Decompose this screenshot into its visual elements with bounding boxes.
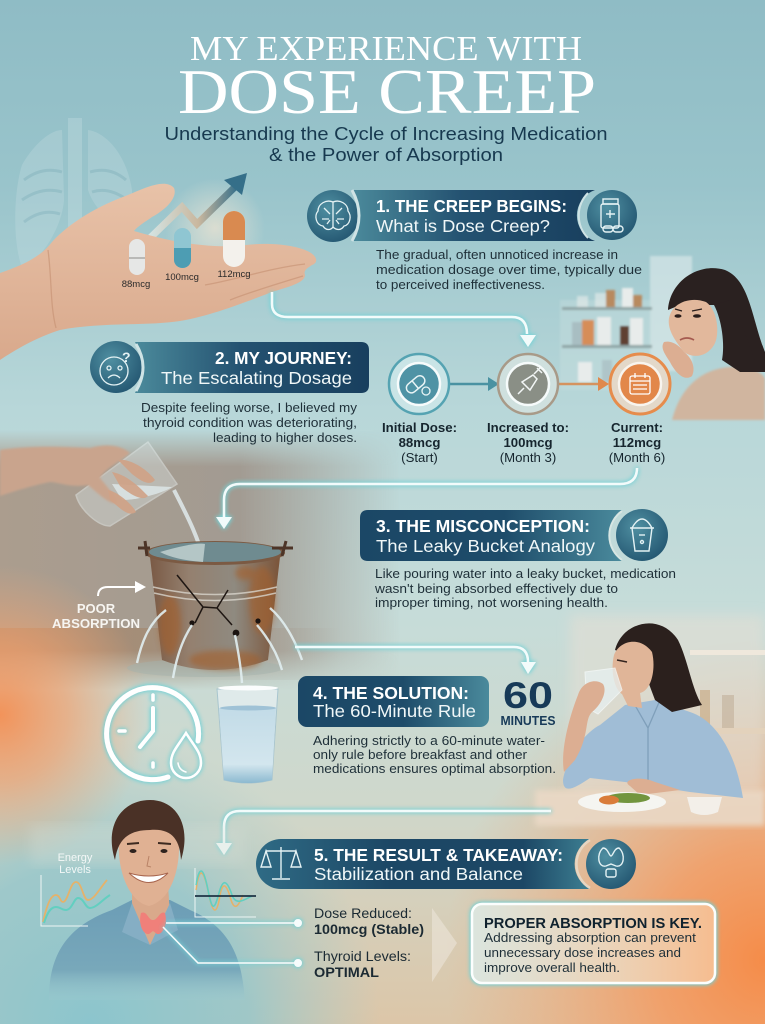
step: current	[609, 354, 670, 465]
section 1 body text: The gradual, often unnoticed increase in	[376, 247, 618, 262]
pill 88mcg: 88mcg	[122, 279, 150, 290]
section 4 body text	[313, 733, 556, 776]
section 5 heading banner: Stabilization and Balance	[314, 864, 523, 884]
60 minutes callout: 60	[503, 675, 553, 716]
water stream	[174, 490, 204, 562]
orange wash at left edge	[0, 560, 150, 870]
takeaway callout box: unnecessary dose increases and	[484, 945, 681, 960]
hand and glass	[585, 668, 622, 714]
title: MY EXPERIENCE WITH	[190, 29, 582, 68]
title	[178, 29, 596, 127]
title: DOSE CREEP	[178, 56, 596, 127]
subtitle: Understanding the Cycle of Increasing Medication	[164, 123, 608, 144]
section 1 heading banner	[307, 190, 637, 242]
icon: scales	[261, 847, 301, 879]
section 4 heading banner	[298, 676, 489, 727]
section 1 heading banner: 1. THE CREEP BEGINS:	[376, 196, 567, 216]
photo: worried woman	[663, 268, 765, 420]
icon: clock with water drop	[107, 688, 201, 780]
callout: poor absorption	[52, 581, 146, 631]
section 2 body text: Despite feeling worse, I believed my	[141, 400, 357, 415]
photo: smiling man with thyroid highlight	[30, 800, 245, 1000]
section 5 heading banner: 5. THE RESULT & TAKEAWAY:	[314, 845, 563, 865]
connectors from thyroid to results	[163, 920, 302, 966]
step: current: 112mcg	[613, 435, 661, 450]
section 1 heading banner: What is Dose Creep?	[376, 216, 550, 236]
60 minutes callout	[500, 675, 556, 728]
step: increased: Increased to:	[487, 420, 569, 435]
trend arrow	[150, 173, 247, 238]
takeaway callout box: PROPER ABSORPTION IS KEY.	[484, 915, 702, 932]
subtitle: & the Power of Absorption	[269, 144, 503, 165]
photo: pharmacy shelves	[560, 256, 692, 390]
photo: woman drinking water at table	[535, 615, 765, 826]
section 3 body text	[374, 566, 676, 610]
section 2 body text: leading to higher doses.	[213, 430, 357, 445]
section 4 heading banner: The 60-Minute Rule	[313, 701, 476, 721]
hand	[0, 184, 316, 360]
results list: OPTIMAL	[314, 965, 379, 980]
takeaway callout box: Addressing absorption can prevent	[484, 930, 696, 945]
results list: 100mcg (Stable)	[314, 922, 424, 937]
section 3 body text: wasn't being absorbed effectively due to	[374, 581, 618, 596]
section 2 heading banner	[90, 341, 369, 393]
photo: wall and table behind bucket	[0, 430, 400, 690]
results list: Thyroid Levels:	[314, 949, 411, 964]
section 3 heading banner: 3. THE MISCONCEPTION:	[376, 516, 590, 536]
energy levels chart: Energy	[58, 852, 93, 864]
pill 112mcg: 112mcg	[217, 269, 251, 280]
step: initial dose: 88mcg	[399, 435, 440, 450]
illustration: glass of water	[217, 686, 278, 783]
step: initial dose: Initial Dose:	[382, 420, 457, 435]
step: increased: 100mcg	[503, 435, 553, 450]
step: increased: (Month 3)	[500, 450, 556, 465]
thyroid highlight	[140, 912, 166, 934]
flow arrow from timeline to bucket	[216, 468, 637, 529]
icon: worried face: ?	[122, 349, 131, 365]
flow arrow from solution to result	[216, 811, 551, 855]
step: current: Current:	[611, 420, 663, 435]
illustration: hand pouring water from glass	[0, 442, 204, 562]
flow arrow from bucket to solution	[295, 647, 536, 674]
section 4 heading banner: 4. THE SOLUTION:	[313, 683, 469, 703]
dosage timeline	[382, 354, 670, 465]
subtitle	[164, 123, 608, 165]
hair	[615, 623, 702, 712]
step: initial dose: (Start)	[401, 450, 438, 465]
face	[613, 642, 654, 708]
plate of food	[578, 792, 722, 815]
arm and fingers	[0, 446, 130, 503]
callout: poor absorption: ABSORPTION	[52, 616, 140, 631]
section 1 body text	[376, 247, 642, 292]
pill 100mcg	[165, 228, 199, 283]
section 4 body text: medications ensures optimal absorption.	[313, 761, 556, 776]
flow arrow from section 1 to timeline	[272, 292, 536, 347]
section 1 body text: to perceived ineffectiveness.	[376, 277, 545, 292]
section 3 body text: improper timing, not worsening health.	[375, 595, 608, 610]
section 2 heading banner: 2. MY JOURNEY:	[215, 348, 352, 368]
callout: poor absorption: POOR	[77, 601, 116, 616]
illustration: leaking rusty bucket	[127, 541, 302, 683]
section 3 heading banner: The Leaky Bucket Analogy	[376, 536, 595, 556]
results list	[314, 906, 424, 980]
section 3 body text: Like pouring water into a leaky bucket, medication	[375, 566, 676, 581]
icon: leaky bucket	[630, 519, 654, 551]
section 5 heading banner	[256, 839, 636, 889]
section 1 body text: medication dosage over time, typically due	[376, 262, 642, 277]
section 4 body text: only rule before breakfast and other	[313, 747, 528, 762]
icon: thyroid	[599, 848, 623, 877]
takeaway callout box: improve overall health.	[484, 960, 620, 975]
illustration: hand holding three pills	[0, 173, 316, 360]
step: initial dose	[382, 354, 457, 465]
thyroid wave chart	[195, 868, 256, 917]
60 minutes callout: MINUTES	[500, 714, 556, 728]
section 2 body text: thyroid condition was deteriorating,	[143, 415, 357, 430]
x-ray lungs image	[15, 118, 132, 268]
step: increased	[487, 354, 569, 465]
section 2 heading banner: The Escalating Dosage	[161, 368, 352, 388]
section 3 heading banner	[360, 509, 668, 561]
icon: pill bottle	[601, 199, 623, 232]
pill 100mcg: 100mcg	[165, 272, 199, 283]
step: current: (Month 6)	[609, 450, 665, 465]
icon: brain	[316, 201, 350, 230]
section 4 body text: Adhering strictly to a 60-minute water-	[313, 733, 545, 748]
glass	[76, 442, 177, 526]
pill 112mcg	[217, 211, 251, 280]
chevron arrow	[432, 908, 457, 982]
results list: Dose Reduced:	[314, 906, 412, 921]
energy levels chart: Levels	[59, 864, 91, 876]
takeaway callout box	[472, 904, 715, 983]
section 2 body text	[141, 400, 357, 445]
shirt	[563, 700, 743, 798]
icon: worried face	[100, 349, 131, 385]
pill 88mcg	[122, 239, 150, 290]
water leaks	[137, 608, 302, 683]
energy levels chart	[41, 852, 110, 926]
